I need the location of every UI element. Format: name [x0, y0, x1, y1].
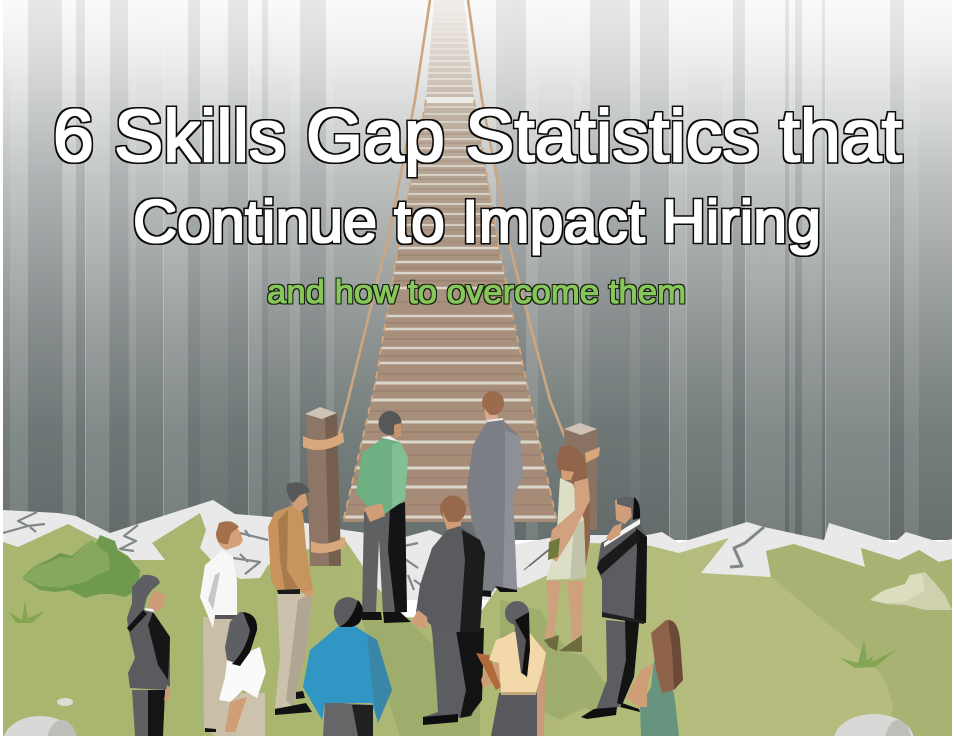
rock ledge: [3, 500, 952, 600]
bridge wood grain: [340, 134, 560, 505]
person: man in white shirt: [200, 521, 243, 736]
person: man in grey suit: [467, 391, 523, 597]
grass tuft, right: [840, 640, 896, 668]
ground: [3, 513, 952, 736]
person: man in tan sweater: [268, 482, 313, 715]
person: woman in black suit: [127, 575, 171, 736]
boulder, right: [834, 714, 914, 738]
person: woman with ponytail: [476, 601, 546, 736]
cast shadows of the group: [362, 600, 610, 736]
bush, left: [22, 535, 140, 598]
suspension bridge: [338, 0, 570, 522]
person: man in green sweater: [356, 411, 411, 623]
title block: [53, 96, 902, 310]
left bridge post: [303, 407, 345, 566]
bridge slats: [340, 2, 560, 517]
title line 1: 6 Skills Gap Statistics that: [53, 96, 902, 177]
small stone: [57, 698, 73, 706]
rock cracks: [3, 512, 764, 590]
title line 2: Continue to Impact Hiring: [133, 188, 821, 255]
right bridge post: [564, 423, 600, 530]
bridge ropes: [338, 0, 570, 450]
grass tuft, left: [9, 601, 45, 623]
person: man in dark suit, front: [411, 496, 485, 725]
background: canyon wall with vertical stripes: [3, 0, 952, 540]
boulder, left: [4, 716, 77, 736]
person: man in black suit, thinking: [581, 497, 647, 719]
person: girl in teal dress: [626, 620, 683, 736]
ground shadow, right: [766, 544, 952, 736]
person: woman in cream dress: [529, 446, 590, 652]
person: woman in white blouse: [219, 612, 266, 736]
bridge deck: [343, 0, 557, 522]
bridge side edges: [343, 100, 557, 522]
bush, right: [870, 572, 952, 610]
subtitle: and how to overcome them: [267, 273, 686, 310]
person: man in blue shirt: [303, 597, 392, 736]
